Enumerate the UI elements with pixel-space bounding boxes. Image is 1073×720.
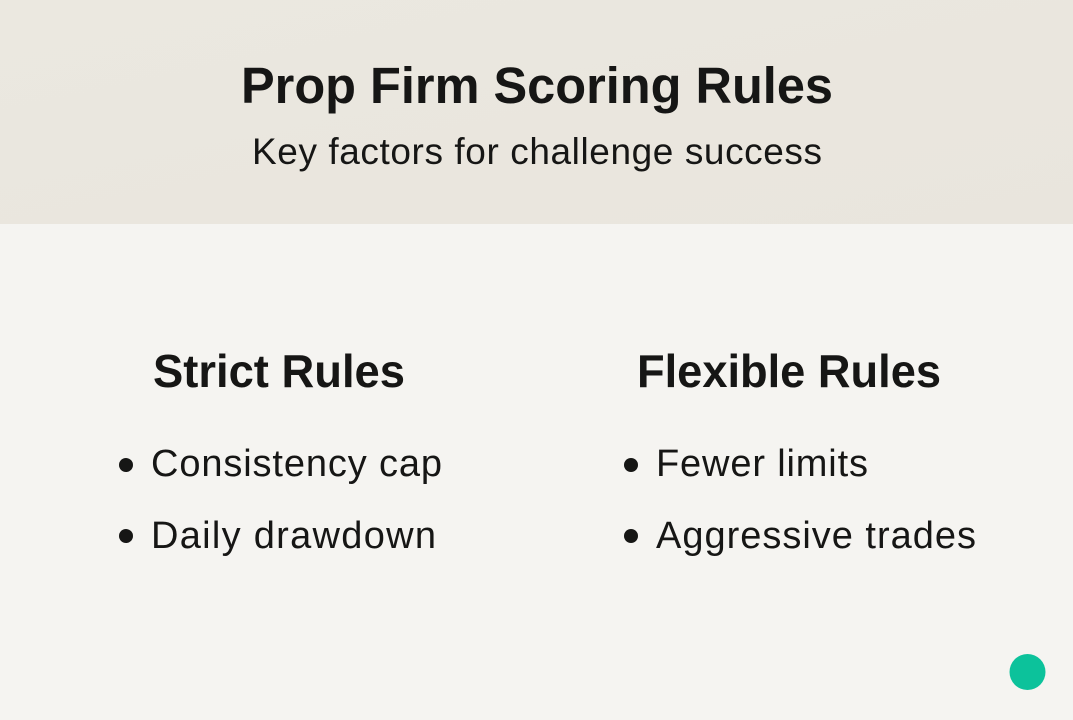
heading: strict rules: Strict Rules (153, 345, 405, 397)
icon: green status dot (1010, 654, 1046, 690)
list item: aggressive trades: Aggressive trades (656, 515, 976, 557)
list item: fewer limits: Fewer limits (656, 443, 868, 485)
panel: strict rules (119, 345, 442, 557)
list item: daily drawdown: Daily drawdown (151, 515, 436, 557)
heading: flexible rules: Flexible Rules (637, 345, 941, 397)
panel: flexible rules (624, 345, 976, 557)
title: Prop Firm Scoring Rules (241, 57, 833, 114)
header band (0, 0, 1073, 224)
list item: consistency cap: Consistency cap (151, 443, 442, 485)
subtitle: Key factors for challenge success (252, 131, 822, 172)
